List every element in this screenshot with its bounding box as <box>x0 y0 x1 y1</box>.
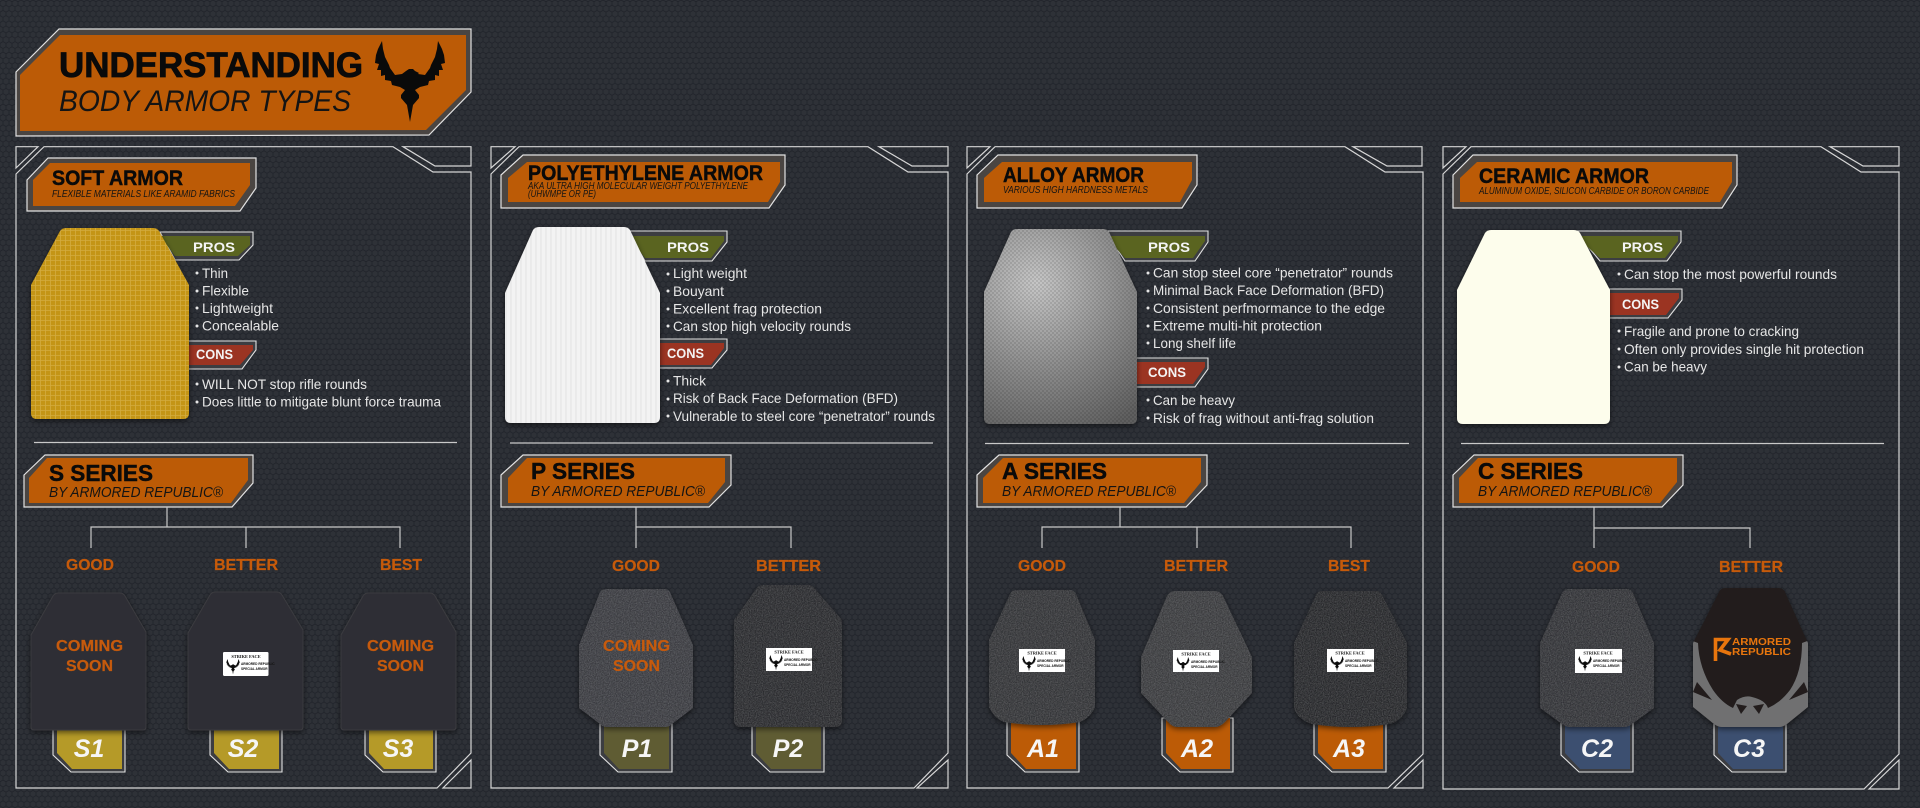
cons tag: CONS <box>667 345 704 361</box>
heading: soft armor: SOFT ARMOR <box>52 167 183 190</box>
pros tag: PROS <box>193 239 235 255</box>
tier tag: P2 <box>752 720 824 772</box>
heading: c series <box>1453 455 1683 507</box>
heading: soft armor: FLEXIBLE MATERIALS LIKE ARAMID FABRICS <box>52 189 235 200</box>
heading: a series <box>977 455 1207 507</box>
pros list: Bouyant <box>673 283 724 299</box>
pros tag: PROS <box>1148 239 1190 255</box>
plate: alloy swatch <box>984 229 1137 424</box>
heading: alloy armor: ALLOY ARMOR <box>1003 164 1144 187</box>
strike face label <box>223 652 275 676</box>
heading: polyethylene armor: AKA ULTRA HIGH MOLECULAR WEIGHT POLYETHYLENE <box>527 181 748 192</box>
tier tag: S3 <box>365 725 436 772</box>
panel frame <box>491 147 948 788</box>
tier tag: A1 <box>1007 718 1079 772</box>
strike face label: STRIKE FACE <box>1335 650 1365 656</box>
plate: S1 <box>31 593 146 730</box>
plate: C2 <box>1540 589 1654 727</box>
strike face label: ARMORED REPUBLIC <box>1345 659 1379 663</box>
heading: polyethylene armor <box>501 155 785 208</box>
strike face label: ARMORED REPUBLIC <box>1191 660 1225 664</box>
tier tag: C2: C2 <box>1581 735 1613 763</box>
pros list: Can stop high velocity rounds <box>673 318 851 334</box>
plate: S3: SOON <box>377 658 424 675</box>
heading: a series: A SERIES <box>1002 458 1107 484</box>
rating labels: GOOD <box>612 558 660 575</box>
plate: A1 <box>989 590 1095 725</box>
cons list: Does little to mitigate blunt force trauma <box>202 394 441 410</box>
heading: ceramic armor: CERAMIC ARMOR <box>1479 165 1649 188</box>
subtitle: body armor types: BODY ARMOR TYPES <box>59 85 351 118</box>
rating labels <box>1572 559 1783 576</box>
strike face label: ARMORED REPUBLIC <box>241 662 275 666</box>
tier tag: S1 <box>53 725 125 772</box>
rating labels: BEST <box>380 557 423 574</box>
plate: S1: COMING <box>56 638 123 655</box>
strike face label: STRIKE FACE <box>231 654 261 659</box>
tier tag: C3: C3 <box>1733 735 1765 763</box>
plate: ceramic swatch <box>1457 230 1610 424</box>
panel: polyethylene armor <box>491 147 948 788</box>
title banner <box>16 29 471 136</box>
tier tag: A1: A1 <box>1026 735 1059 763</box>
cons list <box>666 373 935 424</box>
cons tag: CONS <box>1148 364 1186 380</box>
cons list: Risk of frag without anti-frag solution <box>1153 410 1374 426</box>
cons list: Often only provides single hit protection <box>1624 341 1864 357</box>
pros tag <box>1105 231 1208 261</box>
plate: P1: COMING <box>603 638 670 655</box>
rating labels <box>1018 558 1371 575</box>
pros list: Flexible <box>202 282 249 298</box>
pros list <box>1146 265 1393 351</box>
strike face label <box>766 648 818 671</box>
pros list: Extreme multi-hit protection <box>1153 318 1322 334</box>
plate: S3: COMING <box>367 638 434 655</box>
plate: A3 <box>1294 591 1407 727</box>
panel: alloy armor <box>967 147 1423 788</box>
strike face label: SPECIAL ARMOR <box>1037 664 1064 668</box>
pros tag: PROS <box>667 239 709 255</box>
cons list: WILL NOT stop rifle rounds <box>202 376 367 392</box>
heading: alloy armor: VARIOUS HIGH HARDNESS METALS <box>1003 185 1148 196</box>
tier tag: A3: A3 <box>1332 735 1365 763</box>
tier tag: S1: S1 <box>74 735 104 763</box>
panel frame <box>1443 147 1899 789</box>
cons list: Can be heavy <box>1624 359 1707 375</box>
strike face label: SPECIAL ARMOR <box>1593 664 1620 668</box>
connector tree <box>1594 507 1750 548</box>
logo: armored republic: REPUBLIC <box>1732 647 1791 658</box>
heading: c series: BY ARMORED REPUBLIC® <box>1478 483 1653 500</box>
pros tag <box>628 231 727 261</box>
tier tag: S3: S3 <box>383 735 413 763</box>
tier tag: C3 <box>1714 720 1786 772</box>
rating labels: BETTER <box>756 558 821 575</box>
pros tag <box>1575 231 1681 261</box>
plate: A2 <box>1141 591 1252 727</box>
panel: soft armor <box>16 147 471 788</box>
cons tag: CONS <box>196 346 233 362</box>
pros list: Consistent perfmormance to the edge <box>1153 300 1385 316</box>
connector tree <box>91 507 400 548</box>
heading: polyethylene armor: POLYETHYLENE ARMOR <box>528 162 763 185</box>
strike face label: SPECIAL ARMOR <box>784 663 811 667</box>
strike face label: STRIKE FACE <box>1583 650 1613 656</box>
strike face label: ARMORED REPUBLIC <box>1037 659 1071 663</box>
cons list <box>1618 323 1864 375</box>
pros tag: PROS <box>1622 239 1663 255</box>
cons tag: CONS <box>1622 296 1659 312</box>
heading: s series: S SERIES <box>49 460 153 486</box>
heading: ceramic armor: ALUMINUM OXIDE, SILICON CARBIDE OR BORON CARBIDE <box>1478 186 1709 197</box>
pros list: Thin <box>202 265 228 281</box>
panel frame <box>967 147 1423 788</box>
connector tree <box>636 507 791 548</box>
strike face label <box>1327 649 1379 672</box>
plate: P1: SOON <box>613 658 660 675</box>
plate: polyethylene swatch <box>505 227 660 423</box>
plate: P1 <box>579 589 693 727</box>
logo: armored republic: ARMORED <box>1732 637 1791 648</box>
heading: p series <box>501 455 731 507</box>
strike face label <box>1575 649 1627 673</box>
pros list: Light weight <box>673 265 747 281</box>
heading: c series: C SERIES <box>1478 458 1583 484</box>
strike face label: STRIKE FACE <box>1181 652 1211 656</box>
heading: s series: BY ARMORED REPUBLIC® <box>49 484 224 501</box>
icon: phoenix logo <box>375 41 445 122</box>
connector tree <box>1042 507 1351 548</box>
strike face label <box>1019 649 1071 672</box>
tier tag: P1 <box>600 720 672 772</box>
cons tag <box>1133 358 1208 387</box>
cons tag <box>185 341 256 369</box>
pros list <box>666 265 851 334</box>
pros tag <box>160 232 253 260</box>
cons list: Risk of Back Face Deformation (BFD) <box>673 390 898 406</box>
cons list: Can be heavy <box>1153 392 1235 408</box>
rating labels: BEST <box>1328 558 1371 575</box>
pros list: Lightweight <box>202 300 273 316</box>
cons tag <box>656 339 727 368</box>
pros list: Can stop steel core “penetrator” rounds <box>1153 265 1393 281</box>
logo: armored republic <box>1716 637 1791 661</box>
strike face label: SPECIAL ARMOR <box>1191 665 1218 669</box>
rating labels: BETTER <box>1719 559 1783 576</box>
pros list: Excellent frag protection <box>673 301 822 317</box>
strike face label: ARMORED REPUBLIC <box>784 658 818 662</box>
plate: S3 <box>341 593 456 730</box>
rating labels: BETTER <box>214 557 278 574</box>
rating labels <box>612 558 821 575</box>
pros list: Minimal Back Face Deformation (BFD) <box>1153 282 1384 298</box>
heading: p series: P SERIES <box>531 458 635 484</box>
heading: ceramic armor <box>1453 155 1737 208</box>
strike face label <box>1173 650 1225 672</box>
tier tag: S2: S2 <box>228 735 258 763</box>
strike face label: STRIKE FACE <box>1027 650 1057 656</box>
pros list: Can stop the most powerful rounds <box>1624 266 1837 282</box>
cons list: Fragile and prone to cracking <box>1624 323 1799 339</box>
tier tag: A3 <box>1314 718 1386 772</box>
tier tag: S2 <box>210 725 282 772</box>
strike face label: STRIKE FACE <box>774 650 804 654</box>
strike face label: SPECIAL ARMOR <box>241 667 268 671</box>
heading: soft armor <box>27 158 256 211</box>
rating labels: BETTER <box>1164 558 1228 575</box>
title: understanding: UNDERSTANDING <box>59 46 363 85</box>
tier tag: P1: P1 <box>622 735 652 763</box>
pros list <box>196 265 279 334</box>
cons list <box>196 376 441 410</box>
plate: S1: SOON <box>66 658 113 675</box>
heading: a series: BY ARMORED REPUBLIC® <box>1002 483 1177 500</box>
rating labels: GOOD <box>66 557 114 574</box>
tier tag: P2: P2 <box>773 735 803 763</box>
heading: alloy armor <box>977 155 1197 208</box>
heading: polyethylene armor: (UHWMPE OR PE) <box>528 189 596 200</box>
strike face label: ARMORED REPUBLIC <box>1593 659 1627 663</box>
cons list <box>1146 392 1374 426</box>
panel: ceramic armor <box>1443 147 1899 789</box>
pros list: Long shelf life <box>1153 335 1236 351</box>
tier tag: C2 <box>1561 720 1633 772</box>
pros list: Concealable <box>202 318 279 334</box>
plate: C3 with phoenix and logo <box>1690 588 1810 730</box>
heading: p series: BY ARMORED REPUBLIC® <box>531 483 706 500</box>
plate: S2 <box>188 592 303 730</box>
cons list: Thick <box>673 373 707 389</box>
rating labels: GOOD <box>1018 558 1066 575</box>
plate: soft armor swatch <box>31 228 189 419</box>
rating labels <box>66 557 423 574</box>
cons list: Vulnerable to steel core “penetrator” rounds <box>673 408 935 424</box>
panel frame <box>16 147 471 788</box>
rating labels: GOOD <box>1572 559 1620 576</box>
tier tag: A2 <box>1162 718 1233 772</box>
plate: P2 <box>734 585 842 727</box>
strike face label: SPECIAL ARMOR <box>1345 664 1372 668</box>
tier tag: A2: A2 <box>1180 735 1213 763</box>
cons tag <box>1606 289 1682 318</box>
heading: s series <box>24 455 253 507</box>
